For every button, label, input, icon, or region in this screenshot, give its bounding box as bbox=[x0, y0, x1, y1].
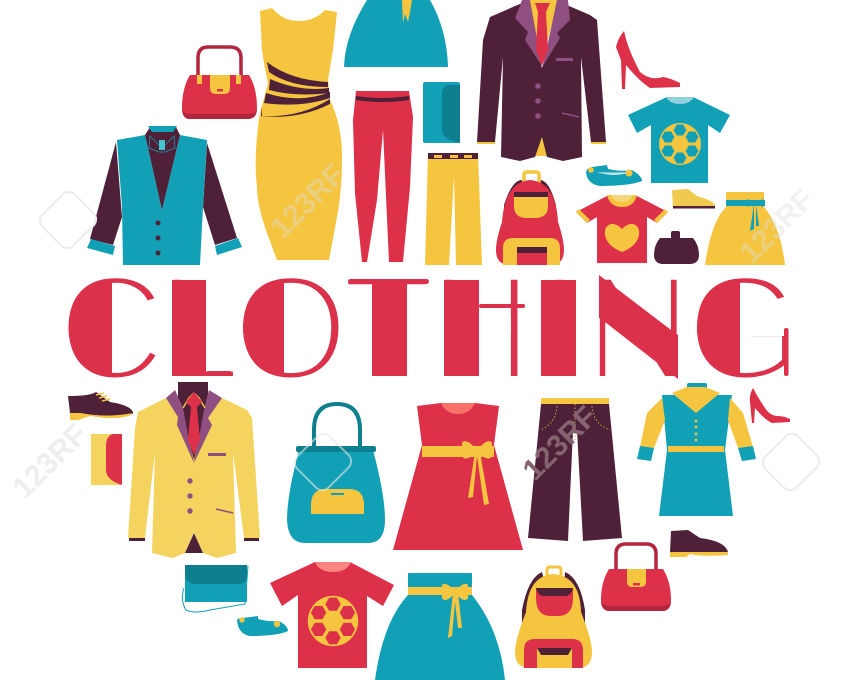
dark lace-up shoe, left bbox=[68, 392, 133, 420]
teal football T-shirt bbox=[628, 97, 730, 183]
yellow suit jacket bbox=[128, 382, 260, 558]
dark suit jacket bbox=[477, 0, 606, 161]
teal and yellow blouse bbox=[637, 383, 756, 516]
teal skirt, bottom bbox=[375, 573, 505, 680]
teal shoulder bag bbox=[287, 404, 385, 543]
teal flat shoe, top bbox=[586, 165, 642, 186]
dark purse bbox=[654, 231, 699, 264]
letter H: H bbox=[430, 243, 532, 411]
dark trousers bbox=[528, 398, 622, 541]
yellow dress with striped sash bbox=[256, 8, 342, 260]
red handbag, upper bbox=[182, 47, 257, 119]
yellow skirt, top right bbox=[705, 192, 785, 265]
watermark: 123RF stamps: 123RF bbox=[517, 400, 604, 487]
letter I: I bbox=[539, 244, 581, 412]
red high heel, small bbox=[750, 388, 790, 423]
teal clutch, top bbox=[423, 82, 460, 143]
watermark: 123RF stamps: 123RF bbox=[734, 183, 821, 270]
red handbag, lower bbox=[601, 544, 671, 611]
watermark: 123RF stamps: 123RF bbox=[265, 158, 352, 245]
watermark: 123RF stamps: 123RF bbox=[7, 418, 94, 505]
watermark: 123RF stamps bbox=[7, 158, 823, 505]
red dress with bow bbox=[393, 403, 523, 550]
yellow shoe, top bbox=[672, 189, 715, 208]
red high heel, top bbox=[616, 31, 680, 89]
letter C: C bbox=[58, 244, 166, 412]
dark shoe, right bbox=[670, 530, 728, 557]
red heart T-shirt bbox=[576, 195, 668, 263]
title: CLOTHING bbox=[58, 243, 803, 412]
red football T-shirt bbox=[270, 562, 394, 668]
red trousers bbox=[353, 91, 413, 262]
teal clutch with strap bbox=[182, 565, 248, 612]
yellow and red clutch bbox=[91, 434, 122, 485]
red backpack bbox=[496, 172, 564, 265]
letter L: L bbox=[158, 244, 241, 412]
yellow backpack bbox=[515, 567, 592, 668]
teal skirt, top bbox=[344, 0, 448, 67]
yellow trousers bbox=[425, 153, 482, 265]
letter T: T bbox=[342, 244, 433, 412]
teal flat shoe, lower bbox=[237, 616, 288, 636]
letter O: O bbox=[232, 244, 349, 412]
letter N: N bbox=[584, 244, 692, 412]
letter G: G bbox=[686, 244, 803, 412]
teal vest and shirt bbox=[87, 126, 242, 265]
